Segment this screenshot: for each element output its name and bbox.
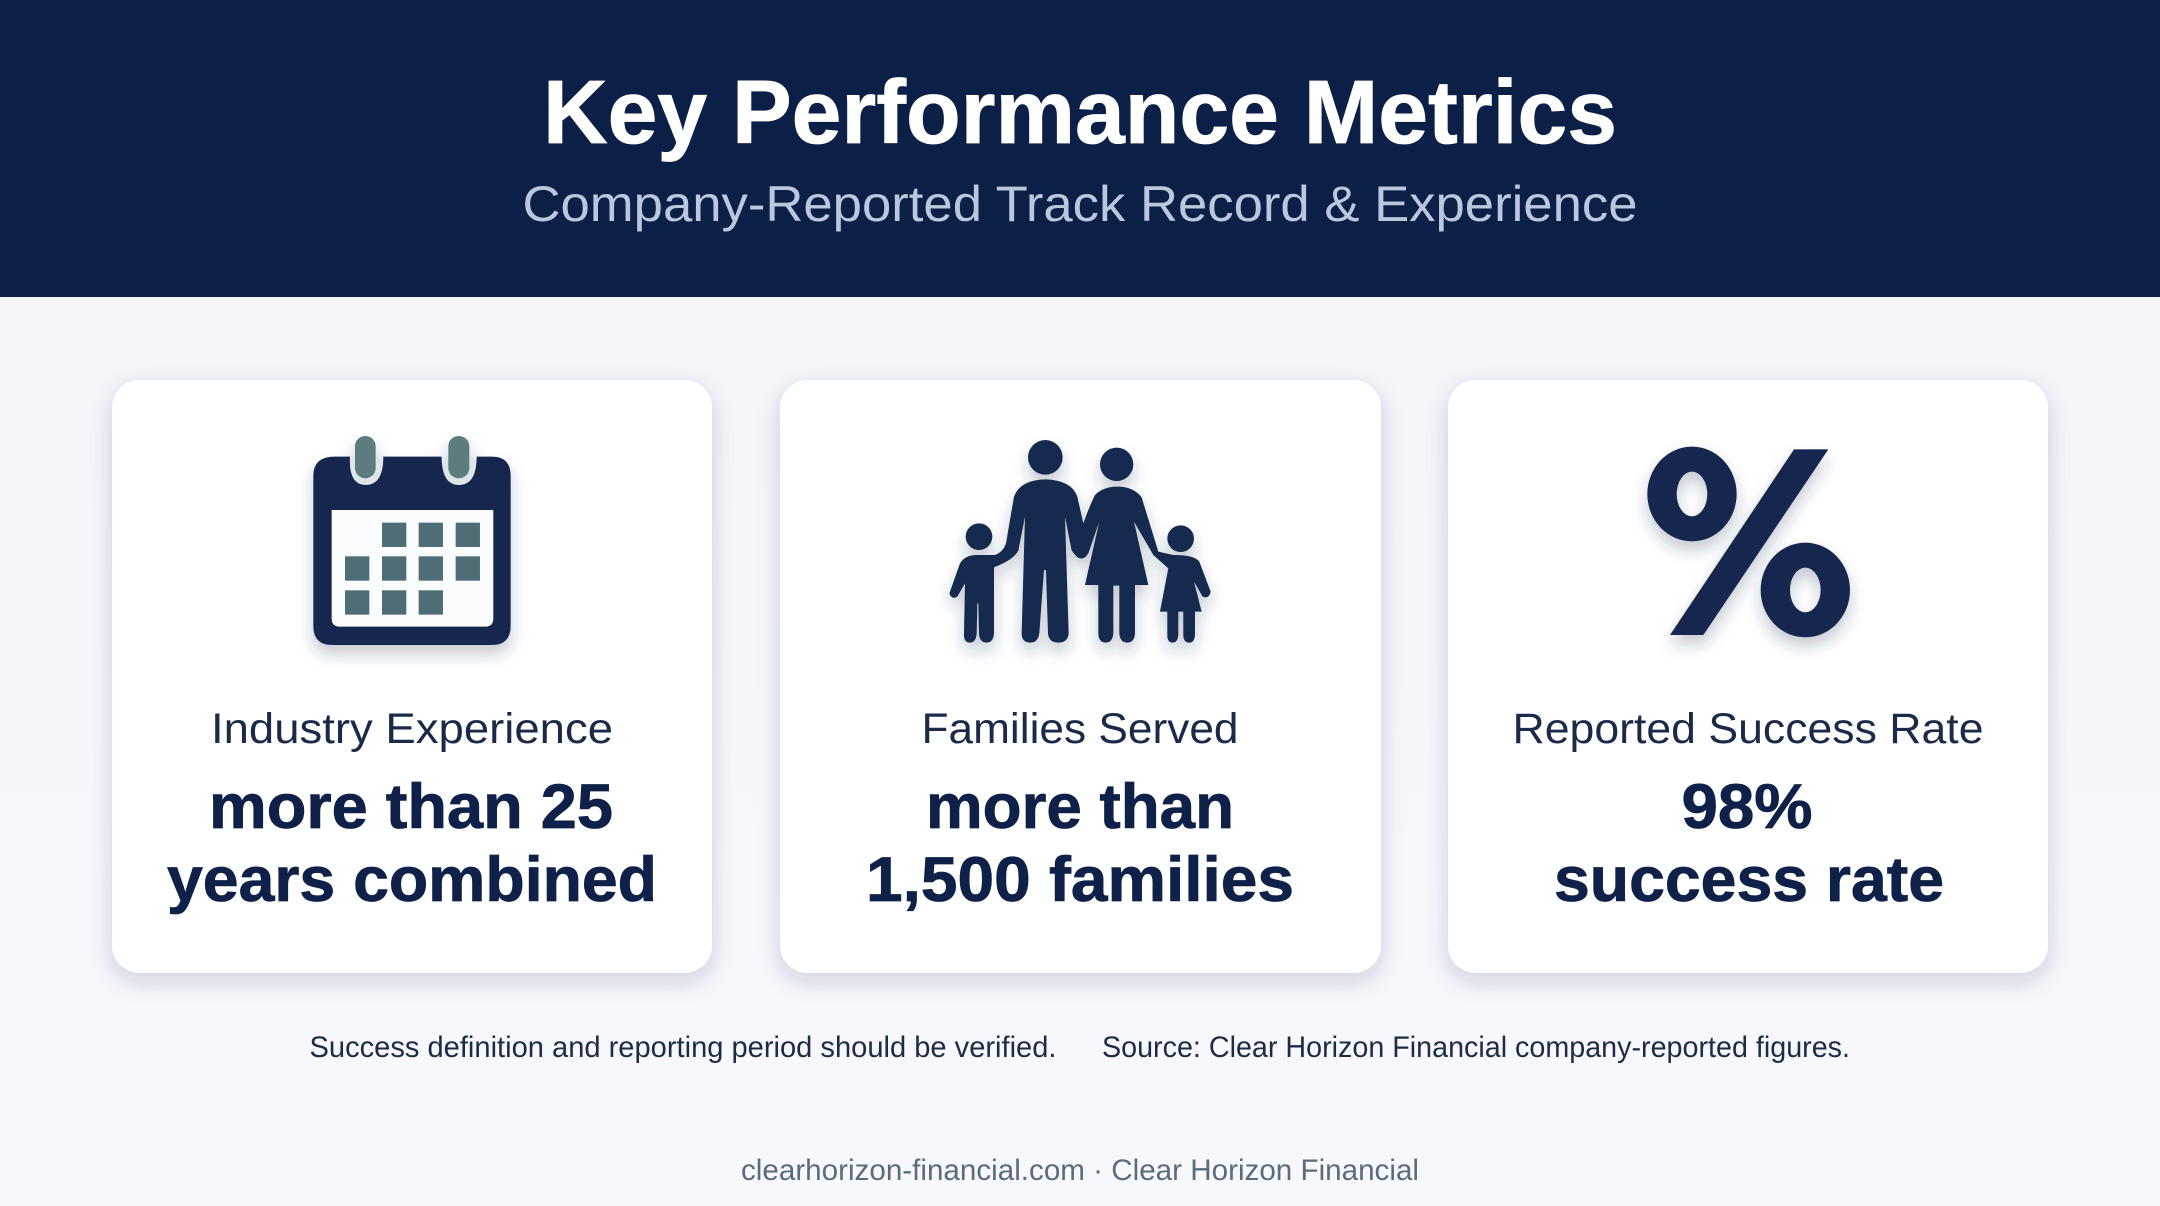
value: more than 25 years combined — [167, 772, 657, 915]
value: more than 1,500 families: more than — [926, 772, 1234, 842]
value: 98% success rate — [1554, 772, 1944, 915]
subtitle: Company-Reported Track Record & Experience — [522, 176, 1638, 232]
icon: family — [949, 440, 1211, 643]
value: 98% success rate: success rate — [1554, 845, 1944, 915]
footnote: source: Source: Clear Horizon Financial company-reported figures. — [1102, 1031, 1850, 1064]
value: 98% success rate: 98% — [1682, 772, 1812, 842]
label: industry experience: Industry Experience — [211, 705, 613, 753]
icon: percent — [1647, 447, 1850, 637]
label: families served: Families Served — [922, 705, 1238, 753]
icon: calendar — [313, 436, 511, 645]
value: more than 25 years combined: years combined — [167, 845, 657, 915]
panel: reported success rate — [1448, 380, 2048, 973]
value: more than 25 years combined: more than 25 — [209, 772, 613, 842]
footnote: verification: Success definition and reporting period should be verified. — [310, 1031, 1056, 1064]
title: Key Performance Metrics — [543, 63, 1617, 163]
value: more than 1,500 families — [866, 772, 1294, 915]
footer: clearhorizon-financial.com · Clear Horizon Financial — [741, 1154, 1419, 1187]
panel: families served — [780, 380, 1381, 973]
panel: industry experience — [112, 380, 712, 973]
header band — [0, 0, 2160, 297]
label: reported success rate: Reported Success Rate — [1512, 705, 1984, 753]
value: more than 1,500 families: 1,500 families — [866, 845, 1294, 915]
